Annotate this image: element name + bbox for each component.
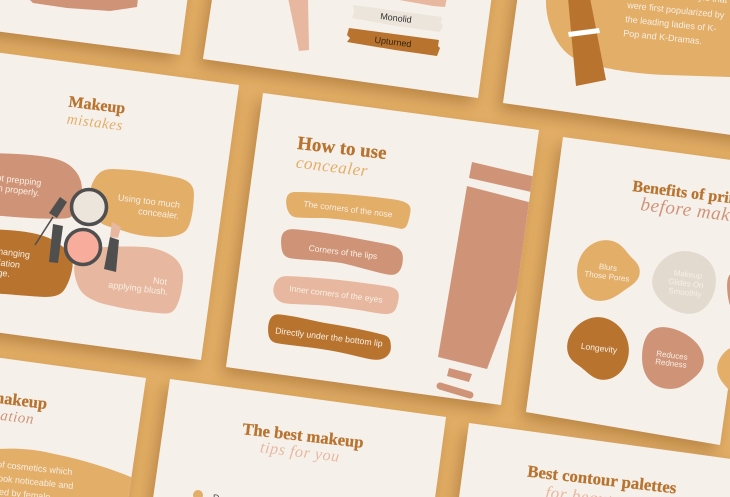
card: bottom left <box>0 355 146 497</box>
blob: too much concealer: concealer. <box>138 206 180 221</box>
blob: makeup glides on smoothly: Smoothly <box>668 286 702 299</box>
upturned label: Upturned <box>374 35 412 49</box>
blob: not applying blush <box>74 246 183 314</box>
heading: How to use <box>296 133 388 164</box>
icon: concealer tube <box>438 162 540 395</box>
card: best makeup tips <box>150 379 446 497</box>
blob: too much concealer <box>90 169 194 237</box>
blob: blurs those pores: Blurs <box>598 262 618 273</box>
bar: under the bottom lip: Directly under the bottom lip <box>275 325 383 349</box>
bullet dot <box>193 490 203 497</box>
body text: the leading ladies of K- <box>625 14 717 34</box>
body text: Pop and K-Dramas. <box>623 28 702 46</box>
peach stroke <box>388 0 447 7</box>
blob: makeup glides on smoothly <box>652 251 716 314</box>
monolid label <box>352 5 443 32</box>
blob: not prepping <box>0 153 82 219</box>
heading: Best contour palettes <box>526 462 678 497</box>
card: how to use concealer <box>226 93 539 405</box>
body text <box>623 0 728 46</box>
monolid label: Monolid <box>380 11 412 25</box>
blob: too much concealer: Using too much <box>117 192 181 210</box>
bar: corners of the lips: Corners of the lips <box>308 243 378 261</box>
blob: partial rose <box>727 272 730 311</box>
icon: mascara <box>35 197 67 263</box>
blob: partial yellow <box>717 347 730 393</box>
blob: not changing foundation <box>0 229 73 297</box>
icon: lipstick <box>104 222 121 272</box>
bar: corners of the nose <box>286 192 411 230</box>
blob: reduces redness: Redness <box>655 357 687 370</box>
card: top left <box>0 0 190 55</box>
bar: corners of the nose: The corners of the nose <box>303 199 393 219</box>
body text: were first popularized by <box>626 0 725 20</box>
brush stroke <box>28 0 138 11</box>
blob: reduces redness: Reduces <box>656 349 688 362</box>
heading: Makeup <box>68 94 126 117</box>
script subheading: mistakes <box>66 112 124 134</box>
yellow blob <box>546 0 730 77</box>
panel: makeup mistakes <box>0 94 194 314</box>
heading: The best makeup <box>242 419 365 452</box>
blob: longevity <box>567 317 629 380</box>
bar: inner corners of the eyes <box>273 276 399 314</box>
yellow text blob <box>0 449 133 497</box>
card: benefits of primer <box>526 137 730 445</box>
card: makeup mistakes <box>0 50 239 360</box>
script subheading: concealer <box>295 153 369 180</box>
blob: makeup glides on smoothly: Glides On <box>668 277 704 290</box>
card: top center <box>203 0 494 98</box>
blob: reduces redness <box>642 327 704 389</box>
icon: compact blush <box>66 230 100 264</box>
blob: not applying blush: applying blush. <box>108 280 169 297</box>
panel: top left remnant <box>28 0 138 11</box>
lipstick band <box>568 28 600 37</box>
peach brush applicator <box>288 0 309 51</box>
lipstick tube <box>568 0 606 86</box>
bar: inner corners of the eyes: Inner corners of the eyes <box>289 283 383 305</box>
script subheading: tips for you <box>259 439 341 466</box>
script subheading: ation <box>0 408 35 428</box>
blob: blurs those pores <box>577 240 640 301</box>
panel: best contour palettes <box>526 462 678 497</box>
upturned label <box>347 28 440 56</box>
panel: how to use concealer <box>268 133 540 395</box>
panel: bottom left remnant <box>0 387 133 497</box>
blob: makeup glides on smoothly: Makeup <box>673 268 703 281</box>
bar: under the bottom lip <box>268 314 391 360</box>
icon: compact top <box>72 190 106 224</box>
blob: not applying blush: Not <box>152 275 168 287</box>
panel: top right remnant <box>546 0 730 86</box>
bar: corners of the lips <box>281 229 403 275</box>
panel: top center remnant <box>288 0 447 56</box>
blob: blurs those pores: Those Pores <box>584 269 630 284</box>
card: top right <box>503 0 730 139</box>
blob: longevity: Longevity <box>580 341 618 355</box>
panel: benefits of primer <box>567 178 730 393</box>
panel: best makeup tips <box>193 419 365 497</box>
body text <box>0 459 74 497</box>
card: best contour palettes <box>456 423 730 497</box>
